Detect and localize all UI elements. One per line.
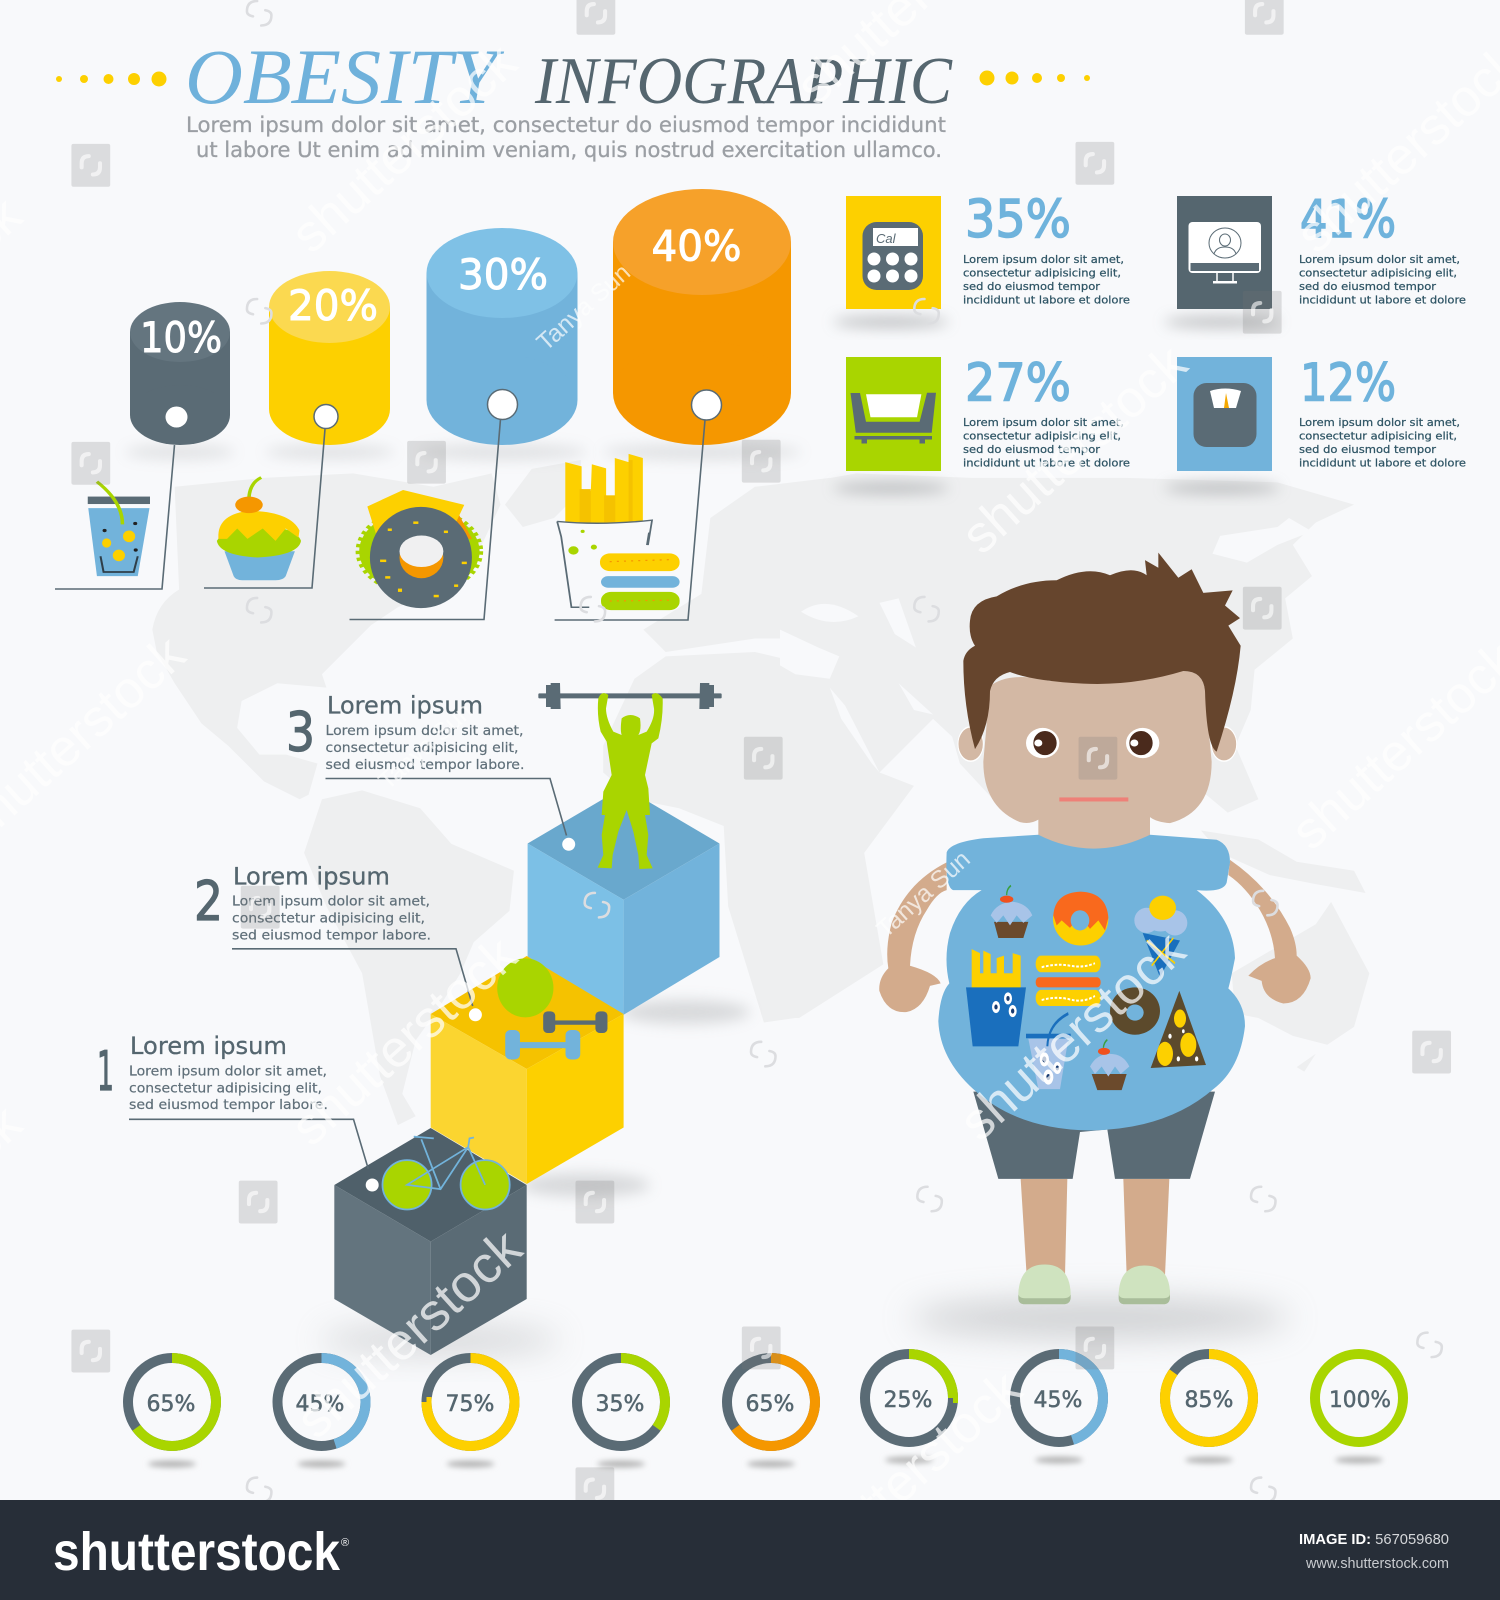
watermark overlay: Tanya Sun: [532, 259, 636, 356]
stat 35%: 35%: [965, 190, 1071, 250]
ears: [958, 727, 1237, 761]
step 1 text: Lorem ipsum dolor sit amet,: [129, 1064, 327, 1080]
ring 25% green: [865, 1354, 953, 1464]
stat text: incididunt ut labore et dolore: [963, 457, 1130, 470]
ring 45% blue second: [1015, 1354, 1103, 1464]
ring 25% green: 25%: [884, 1388, 932, 1413]
ring 75% yellow: [426, 1358, 514, 1468]
ring 85% yellow: 85%: [1185, 1388, 1233, 1413]
footer bar: [0, 1500, 1500, 1600]
subtitle: Lorem ipsum dolor sit amet, consectetur do eiusmod tempor incididunt: [186, 113, 946, 137]
shirt: [938, 835, 1245, 1130]
cylinder 20%: [204, 271, 390, 588]
cylinder 30%: [350, 228, 578, 620]
stat text: [963, 416, 1130, 470]
cube: blue step: [528, 787, 720, 1015]
mouth: [1059, 797, 1128, 801]
ring 100% green: 100%: [1329, 1388, 1391, 1413]
watermark overlay: shutterstock: [280, 33, 528, 264]
step 3 text: 3: [286, 701, 315, 764]
icon: cupcake: [217, 478, 301, 580]
step 2 text: consectetur adipisicing elit,: [232, 910, 425, 926]
shirt print: chocolate donut: [1110, 987, 1160, 1035]
shirt print: drink: [1026, 1014, 1071, 1089]
step 1 text: [97, 1032, 379, 1192]
stat text: incididunt ut labore et dolore: [1299, 457, 1466, 470]
shirt print: pizza: [1151, 991, 1206, 1068]
step 2 text: Lorem ipsum dolor sit amet,: [232, 894, 430, 910]
ring 45% blue: [278, 1358, 366, 1468]
cylinder chart: [55, 189, 791, 620]
watermark overlay: Tanya Sun: [872, 846, 976, 943]
cube: yellow step: [431, 956, 624, 1184]
arms: [879, 860, 1311, 1012]
stat text: sed do eiusmod tempor: [963, 280, 1100, 293]
ring 65% orange: 65%: [746, 1392, 794, 1417]
panel: computer stat: [1177, 190, 1466, 309]
stat text: Lorem ipsum dolor sit amet,: [1299, 253, 1460, 266]
ring 65% orange: [727, 1358, 815, 1468]
stat text: sed do eiusmod tempor: [1299, 443, 1436, 456]
panel: scale stat: [1177, 354, 1466, 471]
watermark overlay: shutterstock: [949, 920, 1197, 1152]
shirt print: cupcake: [991, 886, 1032, 938]
icon: ball and dumbbells: [497, 958, 607, 1059]
watermark overlay: shutterstock: [280, 925, 528, 1157]
icon: donut and burger: [359, 490, 480, 608]
step 2 text: sed eiusmod tempor labore.: [232, 927, 431, 943]
stat 12%: 12%: [1300, 354, 1396, 414]
icon: calculator: [862, 222, 923, 290]
watermark overlay: shutterstock: [286, 1218, 534, 1450]
ring 35% green: 35%: [596, 1392, 644, 1417]
watermark overlay: shutterstock: [951, 334, 1199, 565]
step 3 text: [286, 692, 575, 851]
stat text: Lorem ipsum dolor sit amet,: [1299, 416, 1460, 429]
ring 35% green: [577, 1358, 665, 1468]
ring 100% green: [1315, 1354, 1403, 1464]
character: overweight boy: [879, 553, 1311, 1304]
stat text: incididunt ut labore et dolore: [1299, 294, 1466, 306]
footer url: www.shutterstock.com: [1305, 1555, 1449, 1572]
stat text: sed do eiusmod tempor: [1299, 280, 1436, 293]
cylinder 30%: 30%: [458, 250, 548, 299]
icon: monitor: [1188, 222, 1261, 284]
hair: [963, 553, 1241, 752]
legs: [1021, 1179, 1169, 1276]
ring 45% blue second: 45%: [1034, 1388, 1082, 1413]
icon: weightlifter: [538, 683, 722, 869]
heading: infographic: INFOGRAPHIC: [534, 44, 953, 118]
stat text: consectetur adipisicing elit,: [1299, 266, 1457, 280]
shoes: [1018, 1264, 1170, 1304]
step 1 text: sed eiusmod tempor labore.: [129, 1097, 328, 1113]
footer registered mark: ®: [341, 1537, 349, 1549]
shirt print: fries: [966, 949, 1026, 1046]
cylinder 10%: [55, 302, 230, 589]
ring 45% blue: 45%: [296, 1392, 344, 1417]
stat 41%: 41%: [1300, 190, 1396, 250]
icon: sofa: [850, 393, 936, 444]
ring 65% green: [128, 1358, 216, 1468]
subtitle: ut labore Ut enim ad minim veniam, quis nostrud exercitation ullamco.: [196, 138, 942, 162]
world map background: [152, 460, 1369, 1125]
footer image id: IMAGE ID: 567059680: [1299, 1531, 1449, 1548]
icon: weighing scale: [1194, 383, 1256, 447]
cylinder 40%: [555, 189, 791, 620]
shirt print: second cupcake: [1090, 1040, 1129, 1090]
icon: bicycle: [382, 1137, 510, 1210]
eyes: [1026, 728, 1159, 758]
step 2 text: 2: [194, 870, 223, 933]
progress rings: [128, 1354, 1403, 1468]
stat text: Lorem ipsum dolor sit amet,: [963, 416, 1124, 429]
icon: fries and burger: [557, 454, 680, 610]
stat text: incididunt ut labore et dolore: [963, 294, 1130, 306]
cylinder 20%: 20%: [288, 281, 378, 330]
shirt print: donut: [1053, 892, 1108, 946]
ring 65% green: 65%: [147, 1392, 195, 1417]
cylinder 10%: 10%: [140, 313, 222, 362]
cube stairs: [334, 787, 720, 1355]
icon: drink cup: [88, 482, 150, 576]
watermark overlay: Tanya Sun: [374, 698, 478, 795]
decorative dots right: [980, 70, 1090, 86]
heading: obesity: OBESITY: [185, 33, 505, 120]
step 3 text: sed eiusmod tempor labore.: [326, 757, 524, 773]
watermark overlay: shutterstock: [786, 1359, 1034, 1591]
cylinder 40%: 40%: [652, 222, 742, 270]
decorative dots left: [56, 72, 166, 86]
stat text: consectetur adipisicing elit,: [963, 266, 1121, 280]
stat text: Lorem ipsum dolor sit amet,: [963, 253, 1124, 266]
stat text: consectetur adipisicing elit,: [963, 430, 1121, 443]
drop shadows: [125, 316, 1290, 1354]
step 3 text: Lorem ipsum: [327, 692, 483, 720]
panel: sofa stat: [846, 354, 1130, 471]
shorts: [973, 1092, 1215, 1179]
stat text: sed do eiusmod tempor: [963, 443, 1100, 456]
step 3 text: Lorem ipsum dolor sit amet,: [326, 723, 524, 739]
shirt print: ice cream: [1134, 896, 1187, 977]
step 3 text: consectetur adipisicing elit,: [326, 740, 518, 756]
stat text: consectetur adipisicing elit,: [1299, 430, 1457, 443]
stat text: [963, 253, 1130, 306]
head: [983, 671, 1212, 852]
cube: grey step: [334, 1128, 527, 1355]
step 1 text: 1: [97, 1040, 114, 1103]
title: [56, 33, 1090, 120]
ring 85% yellow: [1165, 1354, 1253, 1464]
footer logo: shutterstock: [53, 1522, 341, 1582]
icon: calculator: Cal: [876, 231, 897, 246]
panel: calculator stat: [846, 190, 1130, 309]
stat 27%: 27%: [965, 354, 1071, 414]
step 2 text: Lorem ipsum: [233, 863, 390, 891]
ring 75% yellow: 75%: [446, 1392, 494, 1417]
stat text: [1299, 416, 1466, 470]
shirt print: burger: [1036, 956, 1101, 1006]
subtitle: [186, 113, 946, 162]
stat text: [1299, 253, 1466, 306]
step 1 text: Lorem ipsum: [130, 1032, 287, 1060]
step 1 text: consectetur adipisicing elit,: [129, 1080, 322, 1096]
step 2 text: [194, 863, 482, 1021]
